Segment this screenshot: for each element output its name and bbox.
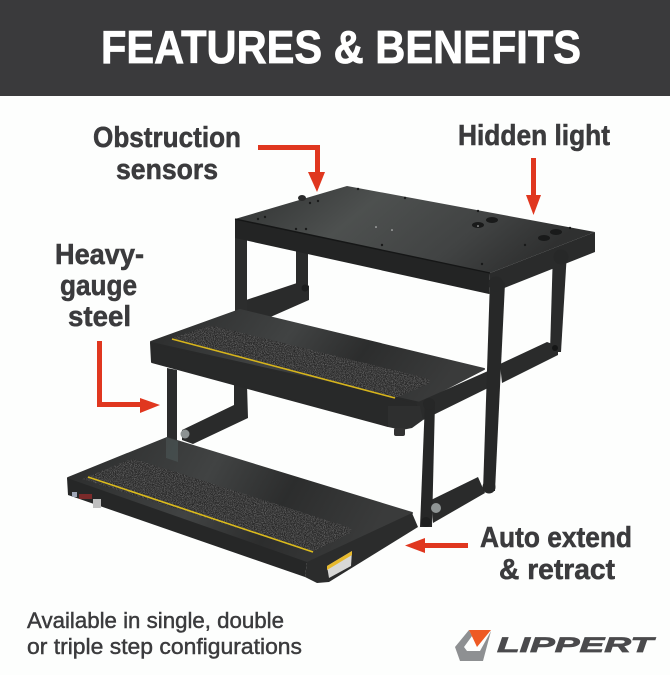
label: auto extend and retract: & retract	[499, 554, 615, 586]
logo mark	[455, 630, 491, 661]
header banner	[0, 0, 670, 96]
configurations note: Available in single, double	[27, 608, 284, 633]
brand badge	[72, 492, 101, 508]
arrow: obstruction sensors	[258, 145, 325, 192]
arrow: auto extend and retract	[405, 538, 468, 553]
title: FEATURES & BENEFITS	[101, 21, 581, 73]
label: heavy-gauge steel	[55, 239, 144, 333]
label: heavy-gauge steel: Heavy-	[55, 239, 144, 271]
logo wordmark: LIPPERT	[497, 634, 657, 657]
label: auto extend and retract	[480, 522, 632, 586]
rear right leg pivot	[554, 250, 568, 264]
warning sticker	[327, 551, 352, 578]
label: obstruction sensors: sensors	[116, 154, 218, 186]
lower left leg	[167, 368, 177, 440]
yellow stripe	[88, 477, 313, 552]
label: hidden light: Hidden light	[458, 120, 610, 152]
mounting holes	[257, 188, 571, 265]
upper left leg	[235, 222, 247, 316]
pivot bolts	[180, 398, 441, 527]
yellow stripe	[172, 339, 395, 398]
reflection on deck	[166, 437, 178, 462]
side rail to main leg	[416, 371, 488, 420]
logo: Lippert	[455, 630, 657, 661]
configurations note: or triple step configurations	[27, 634, 302, 659]
product: three-level step assembly	[67, 186, 595, 583]
anti-slip tread	[82, 459, 352, 552]
sensor nub	[298, 195, 306, 201]
front right lower leg	[420, 401, 435, 527]
bottom step	[67, 437, 418, 583]
top platform	[235, 186, 595, 294]
label: heavy-gauge steel: steel	[68, 301, 131, 333]
configurations note	[27, 608, 302, 659]
label: obstruction sensors	[93, 122, 241, 186]
second step	[151, 310, 488, 436]
anti-slip tread	[172, 326, 430, 398]
arrow: hidden light	[526, 158, 541, 215]
rear legs and links	[182, 250, 567, 523]
main front leg	[483, 280, 505, 491]
label: auto extend and retract: Auto extend	[480, 522, 632, 554]
bracket under step	[388, 406, 423, 430]
arrow: heavy-gauge steel	[97, 341, 160, 413]
label: heavy-gauge steel: gauge	[60, 270, 137, 302]
label: obstruction sensors: Obstruction	[93, 122, 241, 154]
